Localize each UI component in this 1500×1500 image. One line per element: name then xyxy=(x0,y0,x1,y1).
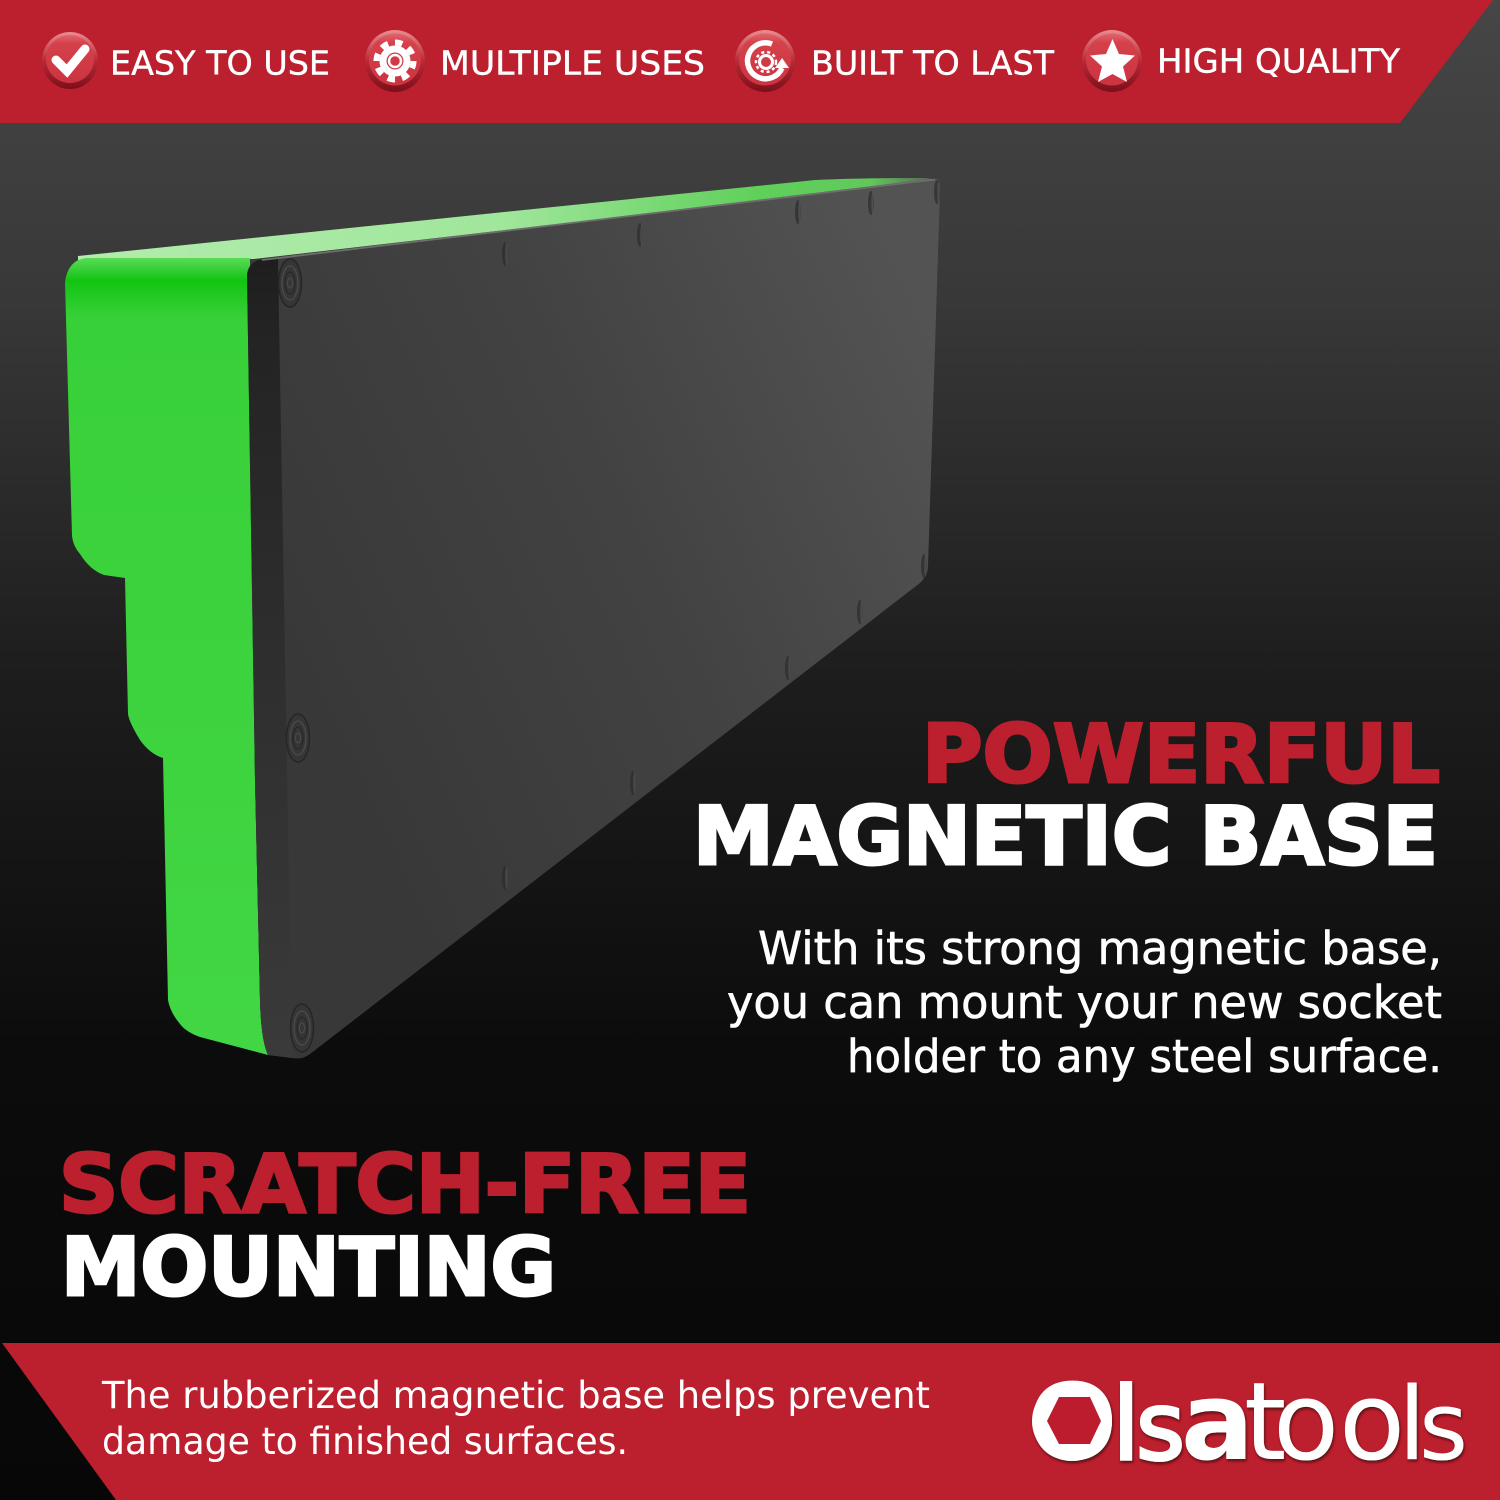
logo: Olsatools: l xyxy=(1112,1365,1140,1483)
text block: rubberized base description xyxy=(101,1374,930,1463)
text block: magnetic base description: With its strong magnetic base, xyxy=(758,922,1442,975)
benefit: easy to use: EASY TO USE xyxy=(110,44,330,82)
logo: Olsatools: s xyxy=(1136,1373,1185,1482)
text block: magnetic base description: holder to any steel surface. xyxy=(847,1030,1442,1083)
product top face xyxy=(78,178,940,260)
logo: Olsatools xyxy=(1028,1360,1468,1485)
heading: scratch-free mounting: SCRATCH-FREE xyxy=(59,1138,751,1231)
product black face xyxy=(247,179,940,1058)
icon: gear in circular arrow xyxy=(735,30,795,92)
heading: scratch-free mounting xyxy=(59,1138,751,1314)
icon: gear xyxy=(365,30,425,92)
top banner xyxy=(0,0,1493,123)
icon: star xyxy=(1082,30,1142,92)
benefit: high quality: HIGH QUALITY xyxy=(1157,42,1401,80)
bottom banner xyxy=(2,1343,1500,1500)
icon: check mark xyxy=(42,32,98,89)
product rubber base edge xyxy=(247,259,292,1058)
benefit: multiple uses: MULTIPLE USES xyxy=(440,44,705,82)
logo: Olsatools: o xyxy=(1339,1360,1405,1485)
text block: rubberized base description: damage to finished surfaces. xyxy=(102,1420,628,1463)
product green side xyxy=(65,258,268,1055)
logo: Olsatools: t xyxy=(1244,1360,1286,1485)
heading: scratch-free mounting: MOUNTING xyxy=(61,1221,556,1314)
logo: Olsatools: o xyxy=(1273,1360,1339,1485)
logo: Olsatools: O xyxy=(1028,1362,1117,1484)
logo: Olsatools: a xyxy=(1181,1360,1254,1485)
benefit: multiple uses xyxy=(365,30,705,92)
benefit: built to last xyxy=(735,30,1055,92)
text block: magnetic base description: you can mount your new socket xyxy=(727,976,1442,1029)
heading: powerful magnetic base: MAGNETIC BASE xyxy=(693,790,1438,883)
heading: powerful magnetic base: POWERFUL xyxy=(922,708,1440,801)
top edge highlight xyxy=(262,180,935,260)
product: magnetic socket holder xyxy=(65,178,940,1058)
product screws xyxy=(278,180,940,1052)
benefit: easy to use xyxy=(42,32,330,89)
logo: Olsatools: l xyxy=(1398,1365,1426,1483)
benefit: high quality xyxy=(1082,30,1401,92)
text block: magnetic base description xyxy=(727,922,1442,1083)
logo: Olsatools: s xyxy=(1419,1373,1468,1482)
benefit: built to last: BUILT TO LAST xyxy=(811,44,1055,82)
text block: rubberized base description: The rubberized magnetic base helps prevent xyxy=(101,1374,930,1417)
heading: powerful magnetic base xyxy=(693,708,1440,883)
